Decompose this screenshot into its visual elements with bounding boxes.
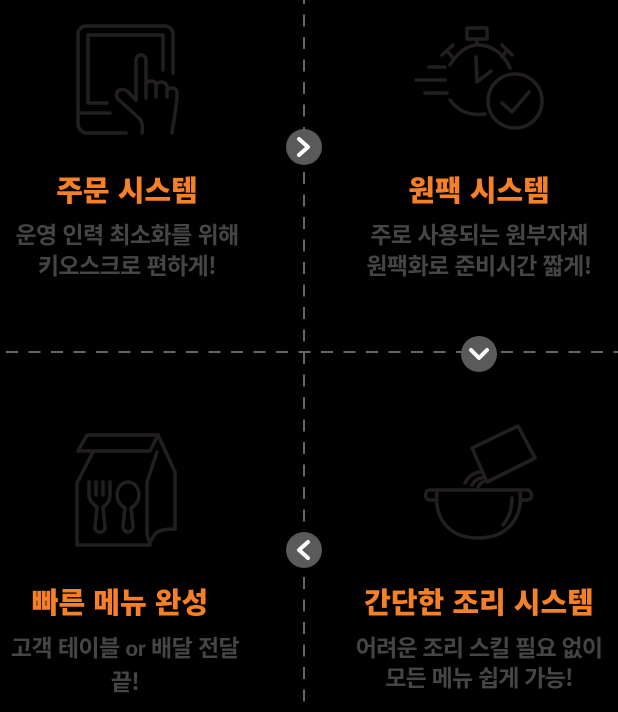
heading: order system: 주문 시스템 <box>56 168 198 210</box>
heading: simple cooking system: 간단한 조리 시스템 <box>364 580 594 622</box>
text: fast menu description: 고객 테이블 or 배달 전달 <box>11 629 239 663</box>
text: one-pack system description: 주로 사용되는 원부자재 <box>370 216 588 250</box>
text: simple cooking description: 모든 메뉴 쉽게 가능! <box>385 659 573 693</box>
button: left arrow <box>286 532 322 568</box>
icon: takeout bag with fork and spoon <box>77 435 175 545</box>
button: right arrow <box>286 129 322 165</box>
heading: one-pack system: 원팩 시스템 <box>408 168 550 210</box>
text: simple cooking description: 어려운 조리 스킬 필요 없이 <box>356 629 602 663</box>
text: fast menu description: 끝! <box>111 663 139 697</box>
text: one-pack system description <box>366 216 592 281</box>
icon: tablet with tapping hand <box>78 26 177 133</box>
button: down arrow <box>461 336 497 372</box>
icon: stopwatch with check mark <box>416 28 542 128</box>
text: order system description: 운영 인력 최소화를 위해 <box>15 216 239 250</box>
text: order system description <box>15 216 239 281</box>
text: fast menu description <box>11 629 239 697</box>
text: one-pack system description: 원팩화로 준비시간 짧게! <box>366 247 592 281</box>
text: simple cooking description <box>356 629 602 693</box>
heading: fast menu completion: 빠른 메뉴 완성 <box>32 580 208 622</box>
text: order system description: 키오스크로 편하게! <box>38 247 216 281</box>
icon: mixing bowl with pouring box <box>426 426 535 538</box>
